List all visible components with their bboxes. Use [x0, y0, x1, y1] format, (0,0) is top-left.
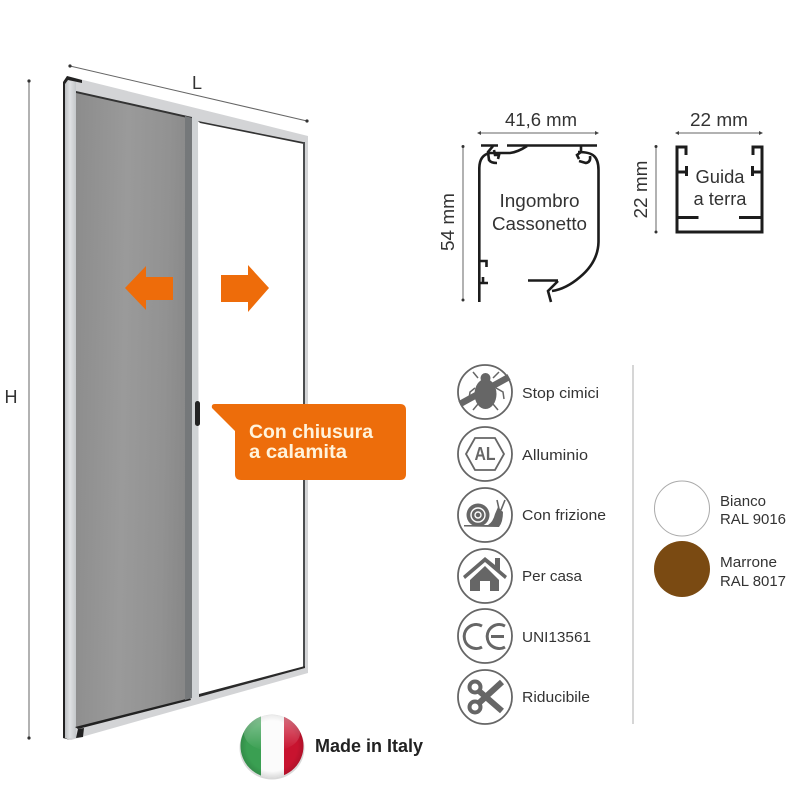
door frame	[63, 76, 308, 740]
colour: marrone: Marrone	[720, 554, 777, 571]
feature: stop cimici: Stop cimici	[522, 385, 599, 402]
feature: alluminio	[458, 427, 588, 481]
label: guida a terra	[694, 167, 747, 209]
width dimension 41,6 mm	[477, 110, 599, 135]
width dimension 22 mm: 22 mm	[690, 110, 748, 130]
label: ingombro cassonetto	[492, 191, 587, 234]
dimension H	[4, 79, 31, 740]
height dimension 54 mm	[438, 145, 464, 302]
dimension H: H	[4, 387, 18, 407]
colour: bianco	[654, 481, 786, 536]
label: ingombro cassonetto: Ingombro	[500, 191, 580, 211]
swatch: brown	[654, 541, 710, 597]
feature: alluminio: Alluminio	[522, 447, 588, 464]
label: guida a terra: Guida	[696, 167, 745, 187]
feature: uni13561	[458, 609, 591, 663]
icon: snail	[458, 488, 512, 542]
guida a terra section	[631, 110, 763, 234]
central slider	[192, 116, 198, 698]
height dimension 54 mm: 54 mm	[438, 193, 458, 251]
height dimension 22 mm: 22 mm	[631, 160, 651, 218]
feature: per casa	[458, 549, 583, 603]
feature: riducibile	[458, 670, 590, 724]
arrow left	[125, 266, 173, 310]
label: guida a terra: a terra	[694, 189, 747, 209]
label: ingombro cassonetto: Cassonetto	[492, 214, 587, 234]
made in italy badge: Made in Italy	[315, 736, 423, 756]
feature: uni13561: UNI13561	[522, 629, 591, 646]
feature: riducibile: Riducibile	[522, 689, 590, 706]
callout	[212, 404, 406, 480]
icon: bug crossed out	[458, 365, 512, 419]
dimension L: L	[192, 73, 202, 93]
icon: CE mark	[458, 609, 512, 663]
profile drawing	[677, 147, 762, 232]
icon: house	[458, 549, 512, 603]
icon: AL hexagon: AL	[474, 444, 496, 464]
feature: stop cimici	[458, 365, 599, 419]
italian flag	[240, 714, 306, 778]
colour: marrone	[654, 541, 786, 597]
dimension L	[68, 64, 309, 123]
magnetic handle	[195, 401, 200, 426]
swatch: white	[654, 481, 710, 536]
profile drawing	[479, 146, 598, 302]
colour: marrone: RAL 8017	[720, 573, 786, 590]
colour: bianco: RAL 9016	[720, 511, 786, 528]
feature: con frizione: Con frizione	[522, 507, 606, 524]
feature: con frizione	[458, 488, 606, 542]
callout: a calamita	[249, 442, 347, 463]
feature: per casa: Per casa	[522, 568, 583, 585]
mesh panel	[76, 92, 192, 727]
colour: bianco: Bianco	[720, 493, 766, 510]
made in italy badge	[240, 714, 423, 780]
callout: Con chiusura	[249, 422, 373, 443]
icon: scissors	[458, 670, 512, 724]
width dimension 41,6 mm: 41,6 mm	[505, 110, 577, 130]
cassonetto section	[438, 110, 599, 302]
white panel	[198, 122, 303, 695]
arrow right	[221, 265, 269, 312]
